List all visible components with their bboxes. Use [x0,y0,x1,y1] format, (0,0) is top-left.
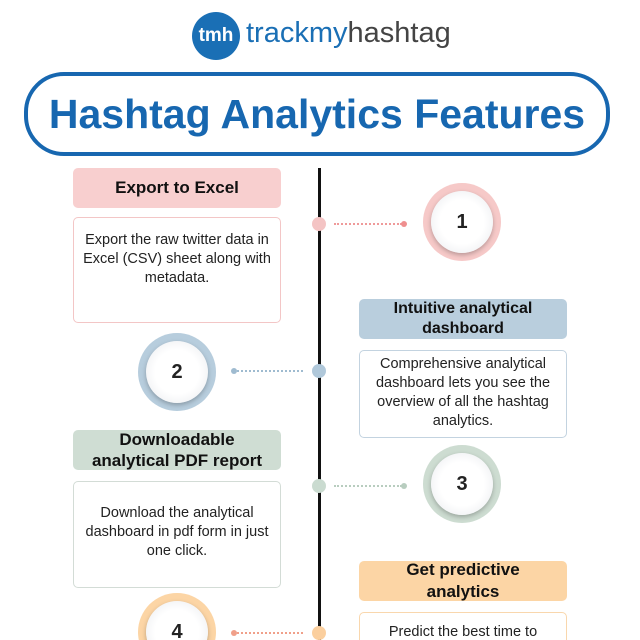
heading [73,168,281,208]
text [73,481,281,588]
connector 2 [231,364,326,378]
text: Export the raw twitter data in Excel (CSV) sheet along with metadata. [83,232,271,286]
icon: tmh circle [192,12,240,60]
icon: number 1: 1 [456,210,468,232]
connector 4 [231,626,326,640]
text: Download the analytical dashboard in pdf form in just one click. [86,505,268,559]
title: Hashtag Analytics Features [49,90,585,136]
heading: Get predictive [406,560,520,579]
heading [359,561,567,601]
icon: number 2: 2 [171,360,183,382]
panel: pdf report [73,430,281,588]
heading [359,299,567,339]
icon: number 1 [423,183,501,261]
icon: number 2 [138,333,216,411]
icon: number 4 [138,593,216,640]
text [359,612,567,640]
text: Comprehensive analytical dashboard lets you see the overview of all the hashtag analytics. [376,356,550,429]
heading: analytical PDF report [92,451,262,470]
heading: Intuitive analytical [394,300,532,317]
logo text: trackmyhashtag [246,17,451,49]
text: Predict the best time to [389,624,537,640]
heading: dashboard [422,320,504,337]
text [73,217,281,323]
heading: Downloadable [119,430,235,449]
heading: analytics [427,582,499,601]
panel: export to excel [73,168,281,323]
title [24,72,610,156]
panel: predictive analytics [359,560,567,640]
connector 1 [312,217,407,231]
timeline [318,168,321,640]
connector 3 [312,479,407,493]
logo [192,12,451,60]
heading [73,430,281,470]
text [359,350,567,438]
icon: number 3: 3 [456,472,468,494]
icon: tmh circle: tmh [199,25,233,46]
heading: Export to Excel [115,178,239,197]
panel: intuitive dashboard [359,299,567,438]
icon: number 3 [423,445,501,523]
